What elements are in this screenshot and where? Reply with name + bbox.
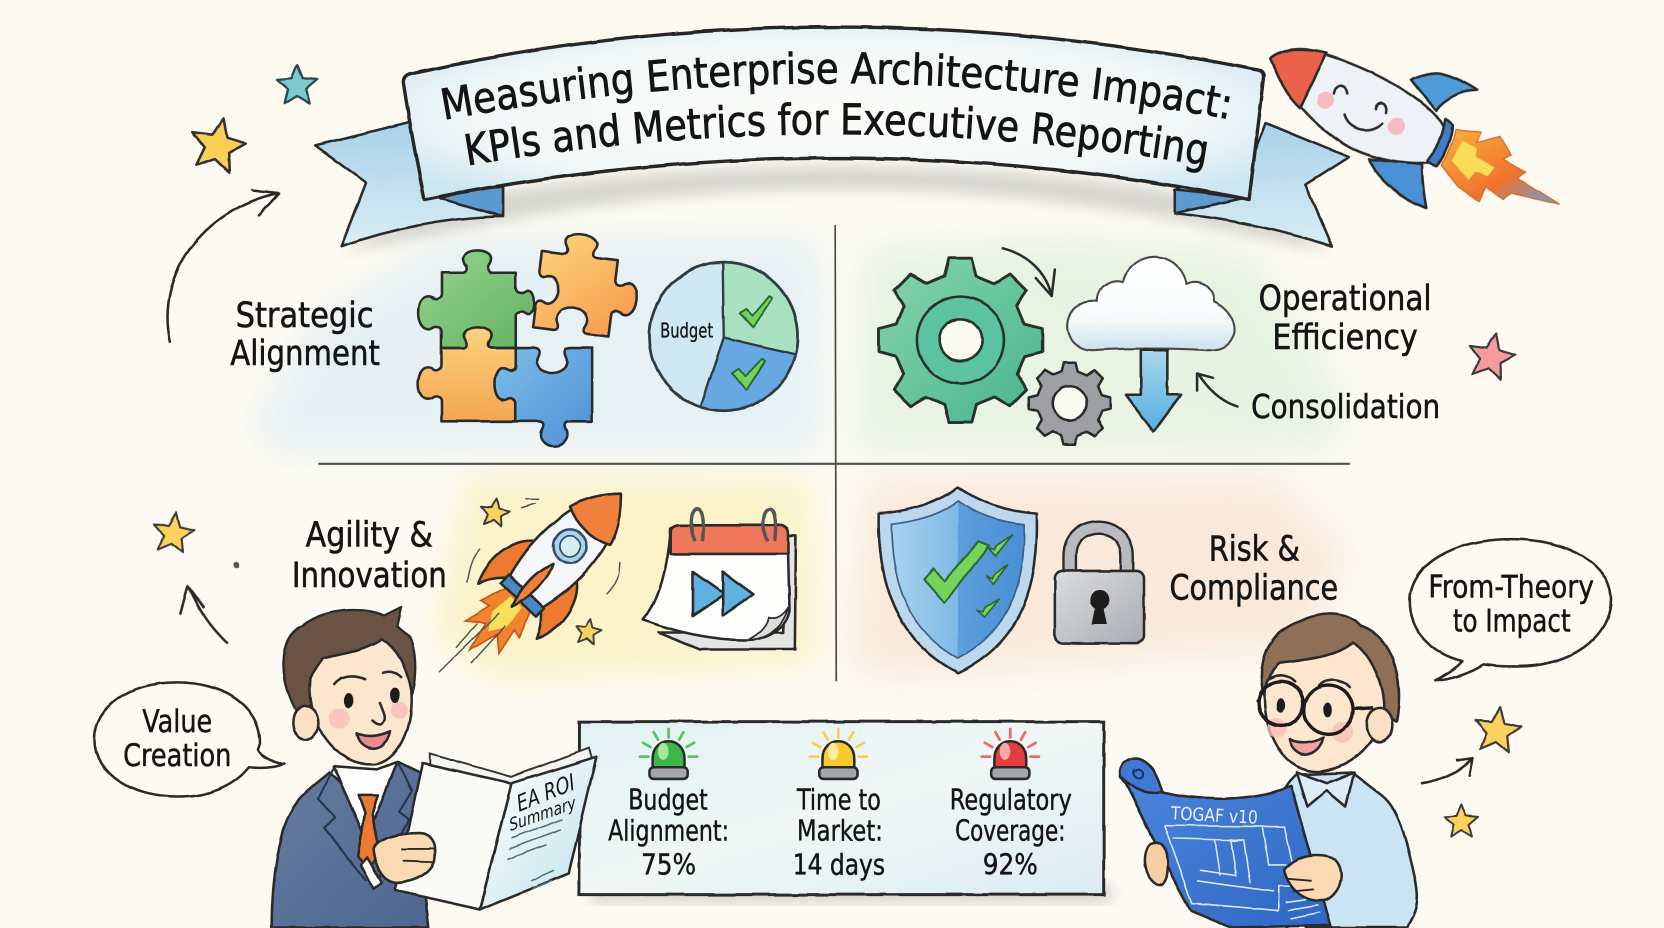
label: consolidation: Consolidation	[1251, 387, 1440, 426]
face	[1264, 642, 1384, 772]
shirt and tie	[333, 762, 397, 840]
heading: agility and innovation	[292, 515, 447, 596]
rocket face	[1317, 86, 1405, 135]
quadrant dividers	[318, 225, 1350, 681]
KPI: regulatory coverage	[950, 729, 1072, 881]
rocket flame	[1441, 129, 1560, 205]
KPI text: time: 14 days	[793, 847, 885, 881]
rocket lower fin	[1369, 159, 1426, 208]
heading: agility and innovation: Innovation	[292, 555, 447, 596]
pie label: Budget	[660, 318, 713, 342]
ribbon left tail	[315, 122, 503, 246]
icon: calendar fast-forward	[643, 509, 796, 649]
rocket nose	[1270, 50, 1327, 108]
KPI: budget alignment	[608, 729, 729, 881]
KPI text: time: Time to	[796, 783, 881, 817]
scorecard frame	[579, 722, 1104, 895]
icon: down arrow	[1126, 350, 1181, 432]
character: executive with report	[272, 607, 596, 928]
lapels	[318, 762, 412, 881]
bubble text	[123, 704, 231, 774]
panel: operational efficiency	[878, 248, 1519, 444]
KPI text: budget	[608, 783, 729, 881]
heading: agility and innovation: Agility &	[306, 515, 433, 556]
bubble text: to Impact	[1453, 603, 1571, 639]
bubble text: From-Theory	[1428, 569, 1594, 605]
heading: risk and compliance: Compliance	[1169, 568, 1338, 609]
rocket upper fin	[1411, 73, 1477, 110]
panel: KPI scorecard	[579, 722, 1110, 902]
rocket tail band	[1427, 119, 1453, 167]
KPI text: budget: Budget	[628, 783, 708, 817]
rocket body	[504, 473, 642, 613]
hand holding report	[361, 833, 436, 889]
KPI text: time	[793, 783, 885, 881]
hands	[1145, 843, 1167, 885]
speech bubble: from theory to impact	[1409, 539, 1611, 680]
panel washes	[255, 239, 1348, 679]
heading: risk and compliance: Risk &	[1209, 528, 1300, 569]
report subtitle: Summary	[508, 793, 578, 836]
report title: EA ROI	[514, 769, 577, 818]
bubble text: Value	[142, 704, 212, 740]
ribbon shadow	[345, 166, 1332, 253]
heading: operational efficiency: Efficiency	[1272, 317, 1418, 358]
icon: shield	[879, 487, 1037, 673]
KPI text: budget: 75%	[641, 847, 696, 881]
KPI text: regulatory: Regulatory	[950, 783, 1072, 817]
arrow: swoosh up	[167, 190, 279, 342]
hair back	[1261, 613, 1399, 722]
character: architect with blueprint	[1120, 613, 1417, 928]
KPI text: regulatory	[950, 783, 1072, 881]
blueprint sheet	[1123, 778, 1331, 928]
rocket nose	[566, 475, 641, 549]
KPI text: regulatory: Coverage:	[955, 813, 1065, 847]
icon: small star	[1444, 804, 1478, 837]
icon: smiling rocket top right	[1270, 49, 1560, 208]
arrow: gear to cloud	[1003, 248, 1055, 296]
panel: strategic alignment	[230, 229, 798, 446]
ear	[1367, 708, 1392, 742]
icon: cloud	[1068, 257, 1235, 350]
icon: pink star	[1464, 329, 1519, 382]
rocket flame	[451, 581, 538, 669]
icon: teal star	[277, 65, 317, 103]
heading: risk and compliance	[1169, 528, 1338, 609]
icon: green beacon	[640, 729, 697, 779]
KPI text: time: Market:	[797, 813, 883, 847]
suit	[272, 762, 429, 928]
face	[309, 639, 411, 764]
ribbon right tail	[1175, 123, 1349, 246]
decorative stars and arrow, lower right	[1422, 704, 1524, 837]
blueprint scroll	[1120, 759, 1163, 809]
open report: EA ROI Summary	[395, 748, 596, 909]
arrow: to star	[1422, 758, 1473, 783]
glasses	[1256, 681, 1373, 734]
facial features	[1267, 675, 1353, 755]
KPI: time to market	[793, 729, 885, 881]
shirt	[1268, 773, 1417, 928]
icon: red beacon	[982, 729, 1039, 779]
facial features	[329, 672, 408, 748]
chart: budget pie	[649, 262, 798, 411]
heading: operational efficiency: Operational	[1259, 278, 1432, 319]
small stars	[479, 497, 511, 528]
bubble text	[1428, 569, 1594, 639]
rocket window	[546, 522, 594, 570]
icon: rocket	[436, 461, 654, 682]
icon: large green gear	[878, 258, 1042, 422]
heading: strategic alignment: Alignment	[230, 333, 380, 374]
icon: yellow star	[186, 113, 250, 175]
heading: operational efficiency	[1259, 278, 1432, 358]
scorecard shadow	[590, 883, 1110, 902]
arrow: consolidation	[1197, 374, 1237, 406]
KPI text: regulatory: 92%	[983, 847, 1038, 881]
icon: padlock	[1055, 527, 1144, 643]
blueprint plan	[1164, 826, 1297, 911]
speech bubble: value creation	[94, 682, 284, 797]
ear	[293, 706, 318, 740]
blueprint title: TOGAF v10	[1169, 803, 1258, 829]
decorative stars and arrow, top left	[167, 65, 317, 342]
blueprint corner legend	[1286, 898, 1320, 919]
icon: yellow beacon	[810, 729, 867, 779]
title ribbon banner	[314, 24, 1350, 252]
icon: puzzle pieces	[418, 229, 644, 446]
small star and arrow	[151, 510, 240, 643]
rocket body	[1270, 49, 1447, 163]
rocket motion lines	[439, 499, 620, 672]
heading: strategic alignment	[230, 295, 380, 374]
hair back	[283, 607, 415, 713]
icon: large star	[1472, 704, 1524, 754]
ribbon body	[403, 27, 1264, 200]
heading: strategic alignment: Strategic	[236, 295, 374, 336]
icon: small grey gear	[1029, 362, 1111, 444]
rocket fins	[474, 527, 544, 598]
panel: agility and innovation	[151, 461, 796, 682]
title line 2: KPIs and Metrics for Executive Reporting	[465, 102, 1208, 173]
title line 1: Measuring Enterprise Architecture Impact:	[441, 51, 1230, 120]
bubble text: Creation	[123, 738, 231, 774]
KPI text: budget: Alignment:	[608, 813, 729, 847]
panel: risk and compliance	[879, 487, 1338, 673]
